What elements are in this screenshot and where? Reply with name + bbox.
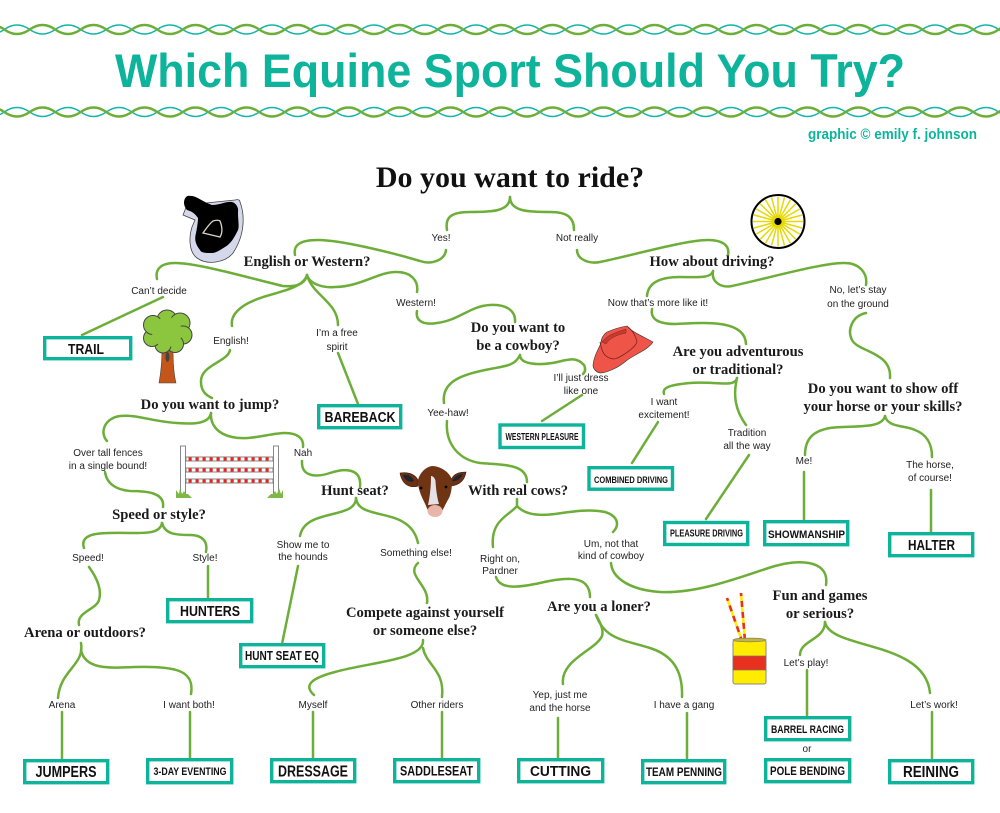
answer label: I want both! bbox=[163, 700, 215, 711]
result box: Hunt Seat Eq bbox=[241, 645, 324, 667]
icon: wagon wheel bbox=[752, 195, 804, 248]
question: arena: Arena or outdoors? bbox=[24, 625, 146, 641]
answer label: Yes! bbox=[431, 233, 451, 244]
answer label: The horse, bbox=[906, 460, 954, 471]
question: show off: your horse or your skills? bbox=[804, 399, 962, 415]
result box: Trail: TRAIL bbox=[68, 341, 104, 358]
answer label: on the ground bbox=[827, 299, 889, 310]
result box: Barrel Racing: BARREL RACING bbox=[771, 724, 844, 736]
result box: Halter: HALTER bbox=[908, 538, 955, 554]
question: jump: Do you want to jump? bbox=[141, 397, 279, 413]
question: fun and games: or serious? bbox=[786, 606, 854, 622]
result box: Reining bbox=[890, 761, 973, 783]
result box: Jumpers: JUMPERS bbox=[36, 764, 96, 781]
answer label: Um, not that bbox=[584, 539, 638, 550]
answer label: Now that’s more like it! bbox=[608, 298, 708, 309]
result box: Bareback bbox=[319, 406, 401, 428]
flowchart connectors bbox=[58, 197, 932, 759]
question: fun and games: Fun and games bbox=[773, 588, 867, 604]
answer label: Let’s work! bbox=[910, 700, 958, 711]
answer label: Me! bbox=[796, 456, 812, 467]
answer label: Yee-haw! bbox=[427, 408, 469, 419]
answer label: English! bbox=[213, 336, 249, 347]
answer label: kind of cowboy bbox=[578, 551, 644, 562]
answer label: Western! bbox=[396, 298, 436, 309]
result box: Trail bbox=[45, 338, 131, 359]
result box: Cutting: CUTTING bbox=[530, 764, 591, 780]
result box: Saddleseat: SADDLESEAT bbox=[400, 762, 473, 778]
answer label: Other riders bbox=[411, 700, 463, 711]
answer label: like one bbox=[564, 386, 599, 397]
result box: Saddleseat bbox=[395, 760, 479, 782]
answer label: Myself bbox=[299, 700, 328, 711]
question: loner: Are you a loner? bbox=[547, 599, 651, 615]
answer label: I want bbox=[651, 397, 677, 408]
result box: Dressage: DRESSAGE bbox=[278, 764, 348, 780]
bottom braid border bbox=[0, 108, 1000, 116]
answer label: Let’s play! bbox=[784, 658, 828, 669]
question: speed or style: Speed or style? bbox=[112, 507, 206, 523]
answer label: Pardner bbox=[482, 566, 518, 577]
answer label: excitement! bbox=[638, 410, 690, 421]
icon: cow head bbox=[400, 466, 466, 517]
answer label: Arena bbox=[49, 700, 76, 711]
result box: Western Pleasure: WESTERN PLEASURE bbox=[506, 432, 579, 443]
question: adventurous: Are you adventurous bbox=[673, 344, 803, 360]
result box: Hunters: HUNTERS bbox=[180, 604, 240, 620]
answer label: of course! bbox=[908, 473, 952, 484]
result box: Pleasure Driving bbox=[665, 522, 748, 544]
question: cowboy: Do you want to bbox=[471, 320, 565, 336]
answer label: I have a gang bbox=[654, 700, 714, 711]
answer label: Something else! bbox=[380, 548, 452, 559]
answer label: Nah bbox=[294, 448, 312, 459]
answer label: spirit bbox=[326, 342, 348, 353]
result box: 3-Day Eventing bbox=[148, 760, 232, 783]
result box: Combined Driving bbox=[589, 468, 672, 489]
result box: Dressage bbox=[272, 760, 355, 782]
answer label: Right on, bbox=[480, 554, 520, 565]
question: driving: How about driving? bbox=[650, 254, 774, 270]
result box: Western Pleasure bbox=[500, 425, 584, 448]
answer label: or bbox=[803, 744, 812, 755]
result box: Pole Bending bbox=[766, 760, 850, 782]
icon: hat bbox=[593, 326, 653, 373]
answer label: Style! bbox=[192, 553, 218, 564]
answer label: Speed! bbox=[72, 553, 104, 564]
result box: Barrel Racing bbox=[766, 718, 850, 740]
heading: main question: Do you want to ride? bbox=[376, 161, 644, 194]
icon: saddle bbox=[183, 196, 243, 262]
answer label: I’ll just dress bbox=[553, 373, 609, 384]
result box: Jumpers bbox=[25, 761, 108, 783]
result box: Team Penning: TEAM PENNING bbox=[646, 767, 722, 779]
result box: Halter bbox=[890, 534, 973, 556]
result box: Showmanship bbox=[765, 522, 848, 545]
answer label: in a single bound! bbox=[69, 461, 147, 472]
result box: Team Penning bbox=[643, 761, 725, 783]
result box: Bareback: BAREBACK bbox=[324, 410, 396, 426]
answer label: Not really bbox=[556, 233, 598, 244]
answer label: No, let’s stay bbox=[829, 285, 887, 296]
title: Which Equine Sport Should You Try? bbox=[115, 44, 905, 97]
answer label: Yep, just me bbox=[533, 690, 587, 701]
answer label: all the way bbox=[723, 441, 771, 452]
question: cowboy: be a cowboy? bbox=[476, 338, 560, 354]
question: real cows: With real cows? bbox=[468, 483, 568, 499]
question: compete: or someone else? bbox=[373, 623, 477, 639]
result box: Combined Driving: COMBINED DRIVING bbox=[594, 475, 668, 486]
question: adventurous: or traditional? bbox=[693, 362, 783, 378]
result box: Hunt Seat Eq: HUNT SEAT EQ bbox=[245, 649, 319, 663]
result box: Cutting bbox=[519, 760, 603, 782]
credit: graphic © emily f. johnson bbox=[808, 127, 977, 143]
answer label: Over tall fences bbox=[73, 448, 143, 459]
icon: jump fence bbox=[176, 446, 283, 498]
result box: Hunters bbox=[168, 600, 252, 622]
answer label: the hounds bbox=[278, 552, 328, 563]
result box: 3-Day Eventing: 3-DAY EVENTING bbox=[154, 766, 226, 778]
question: English or Western: English or Western? bbox=[244, 254, 370, 270]
answer label: Tradition bbox=[728, 428, 766, 439]
question: compete: Compete against yourself bbox=[346, 605, 504, 621]
result box: Showmanship: SHOWMANSHIP bbox=[768, 529, 845, 541]
result box: Reining: REINING bbox=[903, 764, 959, 781]
answer label: I’m a free bbox=[316, 328, 358, 339]
answer label: and the horse bbox=[529, 703, 591, 714]
icon: barrel and poles bbox=[727, 593, 766, 684]
answer label: Can’t decide bbox=[131, 286, 187, 297]
question: hunt seat: Hunt seat? bbox=[321, 483, 389, 499]
question: show off: Do you want to show off bbox=[808, 381, 958, 397]
answer label: Show me to bbox=[277, 540, 329, 551]
result box: Pleasure Driving: PLEASURE DRIVING bbox=[670, 528, 743, 540]
icon: tree bbox=[144, 310, 192, 383]
top braid border bbox=[0, 25, 1000, 34]
result box: Pole Bending: POLE BENDING bbox=[770, 766, 845, 778]
